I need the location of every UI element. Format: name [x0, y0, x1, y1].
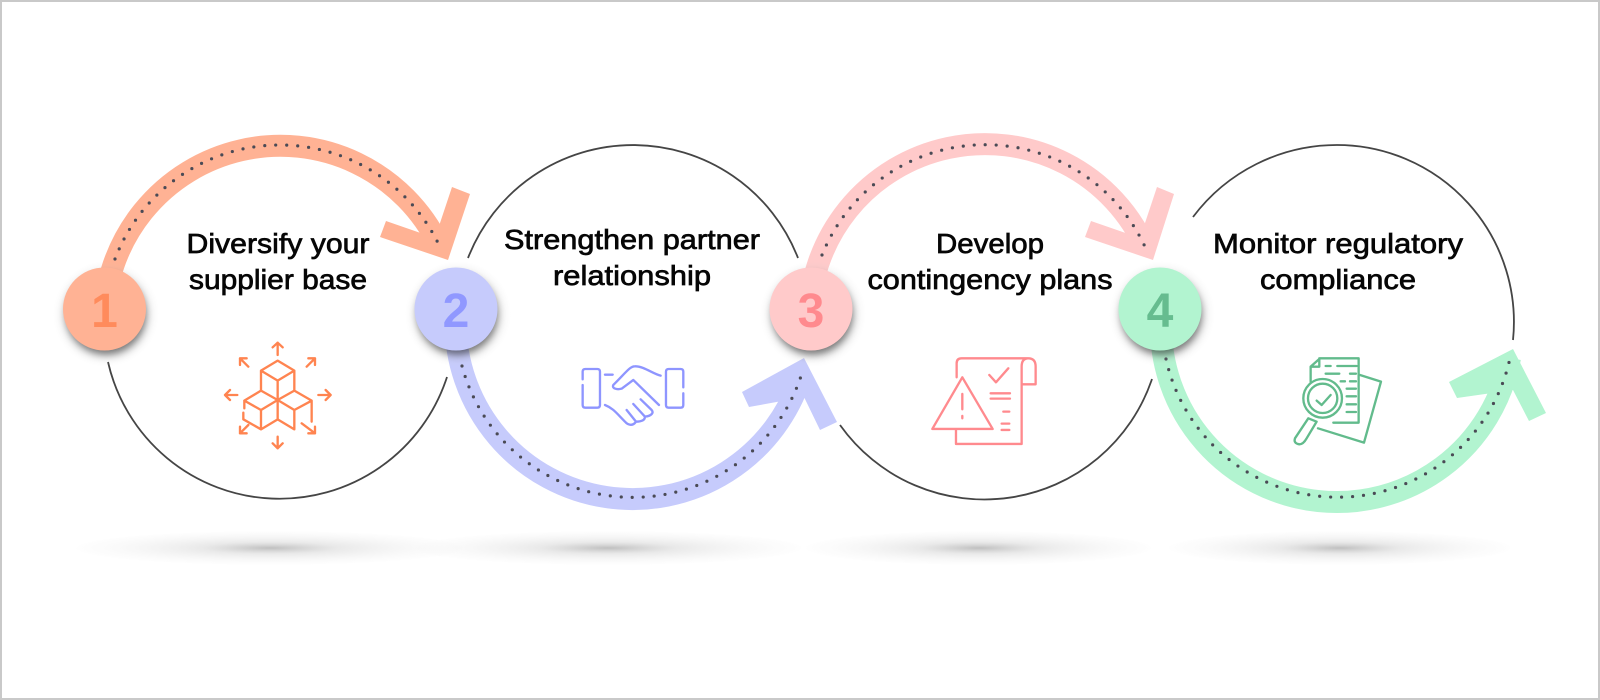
icon: cubes with arrows — [225, 343, 331, 448]
arrow 1: orange — [104, 145, 470, 321]
arrow 2: blue — [455, 320, 837, 499]
heading: step 2: relationship — [553, 260, 711, 291]
icon: handshake — [583, 366, 683, 425]
badge 1 — [53, 261, 159, 367]
badge 3: 3 — [798, 285, 824, 338]
badge 4 — [1109, 261, 1215, 367]
heading: step 3: contingency plans — [868, 264, 1112, 295]
heading: step 2: Strengthen partner — [504, 224, 760, 255]
heading: step 3 — [868, 228, 1112, 295]
thin circle outlines — [108, 145, 1514, 499]
badge 3 — [760, 261, 866, 367]
badge 1: 1 — [91, 285, 118, 338]
arrow 3: pink — [809, 144, 1174, 321]
heading: step 4: Monitor regulatory — [1213, 228, 1463, 259]
badge 2 — [405, 261, 511, 367]
heading: step 2 — [504, 224, 760, 291]
ground shadows — [75, 531, 1512, 565]
heading: step 4: compliance — [1260, 264, 1416, 295]
heading: step 1 — [186, 228, 370, 295]
badge 2: 2 — [443, 285, 469, 338]
heading: step 3: Develop — [936, 228, 1044, 259]
heading: step 1: Diversify your — [186, 228, 370, 259]
icon: warning and checklist document — [932, 358, 1036, 444]
heading: step 1: supplier base — [189, 264, 367, 295]
heading: step 4 — [1213, 228, 1463, 295]
icon: magnifier over documents — [1295, 358, 1381, 444]
arrow 4: green — [1161, 321, 1546, 502]
badge 4: 4 — [1147, 285, 1174, 338]
